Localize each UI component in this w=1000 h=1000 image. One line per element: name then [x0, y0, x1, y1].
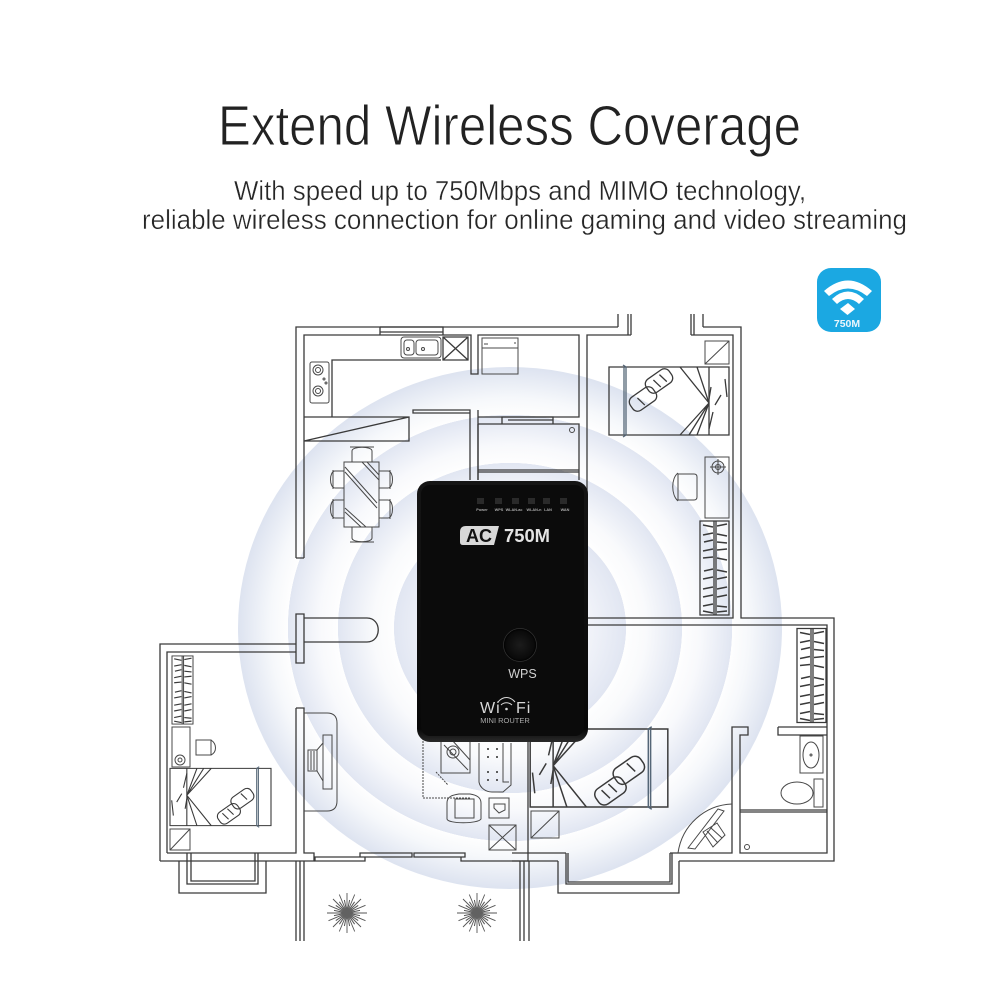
icon: stove [310, 362, 329, 403]
desk with lamp [705, 457, 729, 518]
LED indicators: Power [476, 508, 488, 512]
left bed [170, 767, 271, 827]
WiFi logo: Wi [480, 700, 501, 717]
lower right bed [530, 727, 668, 809]
wifi coverage rings [238, 367, 782, 889]
WiFi logo: MINI ROUTER [480, 716, 530, 725]
WiFi logo [480, 698, 531, 725]
icon: toilet [781, 779, 823, 807]
top right bed [609, 365, 729, 437]
icon: 750M wifi badge [817, 268, 881, 332]
walls: kitchen and upper left [296, 314, 703, 558]
small room [478, 417, 579, 480]
WPS button [504, 628, 537, 681]
left bedroom lower walls [160, 708, 314, 893]
left closet square [170, 829, 190, 850]
icon: washbasin [800, 736, 823, 773]
kitchen counter and window [332, 327, 468, 417]
icon: dining table with chairs [330, 447, 392, 542]
LED indicators: WPS [495, 508, 504, 512]
WPS button: WPS [508, 667, 537, 681]
walls: top right bedroom [585, 327, 834, 861]
lower right bedroom walls [512, 740, 679, 893]
subtitle text block: reliable wireless connection for online gaming and video streaming [142, 204, 907, 235]
AC 750M label: AC [466, 526, 492, 546]
LED indicators: WLAN-ac [506, 508, 522, 512]
living room furniture [423, 738, 516, 850]
LED indicators [476, 498, 570, 512]
LED indicators: WLAN-n [527, 508, 542, 512]
wardrobe right top [700, 521, 729, 615]
chair [673, 473, 697, 501]
subtitle text block [142, 175, 907, 235]
lower right closet square [531, 811, 559, 838]
subtitle text block: With speed up to 750Mbps and MIMO technology, [234, 175, 806, 206]
kitchen hood and slope [304, 417, 409, 441]
sliding door and terrace walls [296, 853, 529, 941]
router device [417, 481, 588, 742]
icon: kitchen sink [401, 337, 441, 358]
kitchen appliance box [482, 338, 518, 374]
title: Extend Wireless Coverage [218, 94, 801, 158]
corner desk [678, 804, 732, 853]
AC 750M label: 750M [504, 525, 550, 546]
icon: 750M wifi badge: 750M [834, 318, 860, 330]
right wardrobe [797, 628, 826, 722]
WiFi logo: Fi [516, 700, 531, 717]
LED indicators: WAN [561, 508, 570, 512]
LED indicators: LAN [544, 508, 552, 512]
wall pillar and hall counter [160, 614, 378, 861]
left desk [172, 727, 190, 767]
closet square top right [705, 341, 729, 364]
TV cabinet [304, 713, 337, 811]
AC 750M label [460, 525, 550, 546]
left chair [196, 740, 216, 755]
walls: bathroom [740, 727, 827, 812]
floor plan [160, 314, 834, 941]
left wardrobe [172, 656, 193, 724]
plants [327, 893, 497, 933]
